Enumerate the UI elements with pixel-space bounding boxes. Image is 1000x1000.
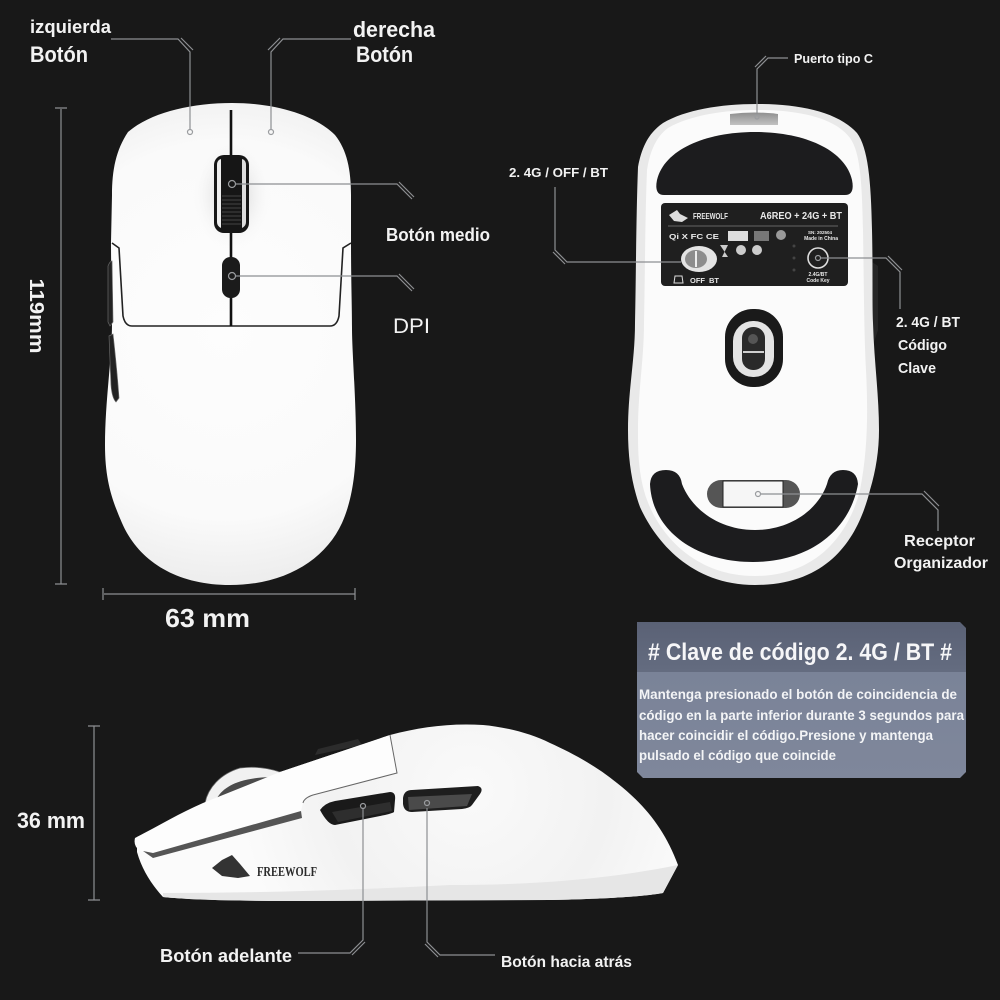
callout: code key: 2. 4G / BT — [896, 314, 960, 331]
certifications: Qi X FC CE — [669, 234, 719, 241]
dimension: height — [17, 726, 100, 900]
callout: forward button: Botón adelante — [160, 946, 292, 966]
callout: right button: derecha — [353, 17, 436, 42]
back button — [403, 786, 482, 812]
callout: USB-C port — [755, 51, 874, 119]
callout: left button: izquierda — [30, 17, 112, 37]
made in: SN: 202504 — [808, 230, 832, 235]
callout: mode switch: 2. 4G / OFF / BT — [509, 165, 608, 180]
callout: middle button: Botón medio — [386, 225, 490, 245]
receiver storage — [707, 480, 800, 508]
DPI button — [222, 257, 240, 298]
bottom shell inner face — [638, 110, 867, 576]
panel heading: # Clave de código 2. 4G / BT # — [648, 639, 952, 666]
bottom view mouse — [628, 104, 879, 585]
callout: DPI: DPI — [393, 315, 430, 338]
panel: pairing instructions — [637, 622, 966, 778]
panel text — [639, 686, 964, 763]
top shell — [105, 103, 356, 585]
callout: code key — [816, 256, 960, 377]
panel header — [637, 622, 966, 672]
centre seam — [230, 110, 232, 326]
dimension: length: 119mm — [25, 278, 47, 354]
dimension: width: 63 mm — [165, 603, 250, 633]
lower glide pad — [650, 470, 858, 562]
freewolf wordmark: FREEWOLF — [257, 865, 317, 880]
code key text: 2.4G/BT — [809, 272, 827, 278]
right side buttons — [872, 262, 878, 345]
forward button — [320, 792, 395, 825]
callout: forward button — [160, 804, 366, 966]
code key button — [808, 248, 828, 268]
panel text: pulsado el código que coincide — [639, 747, 836, 763]
callout: USB-C port: Puerto tipo C — [794, 51, 874, 66]
callout: receiver: Receptor — [904, 533, 975, 550]
callout: middle button — [228, 180, 490, 245]
callout: code key: Clave — [898, 360, 936, 377]
bottom shell — [628, 104, 879, 585]
optical sensor — [725, 309, 783, 387]
top view mouse — [105, 103, 356, 585]
dimension: length — [25, 108, 67, 584]
product label — [661, 203, 848, 286]
upper glide pad — [656, 132, 853, 195]
button seam — [303, 735, 397, 803]
freewolf logo mark — [212, 855, 250, 878]
logo mark — [669, 210, 688, 222]
panel seams — [112, 243, 351, 326]
dimension: height: 36 mm — [17, 808, 85, 833]
dimension: width — [103, 588, 355, 633]
grey trim — [143, 811, 302, 858]
callout: receiver — [756, 491, 988, 572]
side view mouse — [135, 724, 678, 901]
scroll wheel side — [205, 767, 280, 803]
mode switch — [681, 246, 717, 272]
product label: Made in China — [804, 236, 838, 242]
callout: code key: Código — [898, 337, 947, 354]
dpi hump — [315, 739, 362, 755]
product label: Code Key — [806, 278, 830, 284]
callout: left button: Botón — [30, 42, 88, 67]
panel body — [637, 672, 966, 778]
brand: FREEWOLF — [693, 211, 728, 221]
callout: receiver: Organizador — [894, 555, 988, 572]
product label: BT — [709, 276, 719, 285]
USB-C port — [730, 112, 778, 125]
callout: mode switch — [509, 165, 681, 264]
callout: DPI — [228, 272, 430, 338]
model: A6REO + 24G + BT — [760, 211, 842, 222]
callout: right button — [268, 17, 436, 134]
side body — [137, 724, 678, 901]
panel text: hacer coincidir el código.Presione y mantenga — [639, 727, 933, 743]
wheel shadow — [190, 137, 274, 253]
callout: left button — [30, 17, 193, 134]
callout: back button: Botón hacia atrás — [501, 954, 632, 971]
top button — [135, 735, 397, 856]
bottom band — [163, 865, 678, 901]
callout: right button: Botón — [356, 42, 413, 67]
panel text: código en la parte inferior durante 3 segundos para — [639, 707, 964, 723]
switch labels: OFF — [690, 276, 705, 285]
callout: back button — [424, 800, 632, 971]
left side buttons — [108, 261, 119, 402]
scroll wheel — [214, 155, 249, 233]
panel text: Mantenga presionado el botón de coincidencia de — [639, 686, 957, 702]
